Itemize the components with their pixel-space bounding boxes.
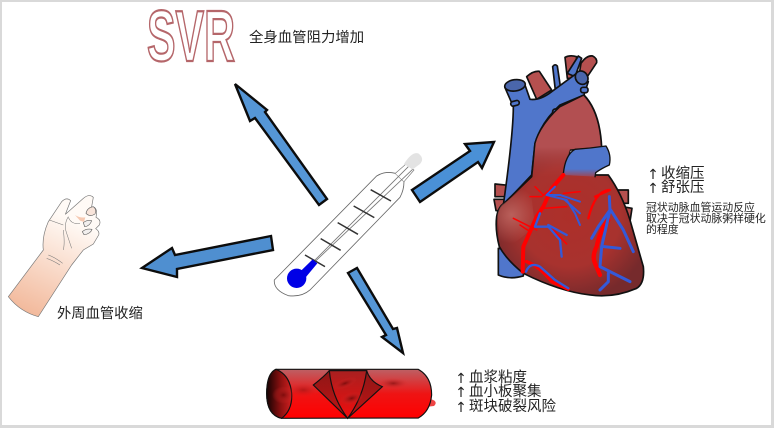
icon: thermometer bbox=[274, 153, 422, 296]
label: peripheral vasoconstriction: 外周血管收缩 bbox=[57, 305, 143, 322]
text: blood effects: ↑ bbox=[455, 400, 467, 416]
coronary veins bbox=[526, 187, 633, 290]
icon: heart bbox=[494, 56, 644, 296]
coronary arteries bbox=[513, 175, 610, 289]
text: blood effects: 斑块破裂风险 bbox=[469, 398, 556, 415]
text: blood effects: ↑ bbox=[455, 385, 467, 401]
text: blood effects: ↑ bbox=[455, 371, 467, 387]
heart pulmonary trunk bbox=[563, 146, 610, 177]
arrow: to heart bbox=[412, 142, 494, 202]
arrow: to hand bbox=[142, 236, 273, 277]
text: blood effects bbox=[455, 368, 556, 416]
heart veins bbox=[498, 56, 591, 278]
text: systolic and diastolic pressure: ↑ bbox=[647, 167, 659, 183]
icon: blood vessel bbox=[267, 369, 436, 418]
text: systolic and diastolic pressure: 舒张压 bbox=[661, 179, 704, 196]
text: systolic and diastolic pressure: ↑ bbox=[647, 181, 659, 197]
arrow: to blood vessel bbox=[348, 268, 403, 353]
heart body bbox=[496, 95, 644, 296]
label: systemic vascular resistance: 全身血管阻力增加 bbox=[249, 28, 364, 46]
text: blood effects: 血小板聚集 bbox=[469, 382, 542, 400]
text: systolic and diastolic pressure: 收缩压 bbox=[661, 165, 704, 182]
text: coronary vasomotor response: 取决于冠状动脉粥样硬化 bbox=[646, 211, 766, 225]
text: coronary vasomotor response bbox=[646, 200, 766, 236]
text: blood effects: 血浆粘度 bbox=[469, 368, 527, 386]
heart back vessels bbox=[494, 56, 632, 222]
icon: hand bbox=[8, 196, 100, 317]
text: coronary vasomotor response: 冠状动脉血管运动反应 bbox=[646, 200, 755, 214]
text: coronary vasomotor response: 的程度 bbox=[646, 222, 679, 236]
arrow: to SVR bbox=[235, 84, 327, 205]
text: systolic and diastolic pressure bbox=[647, 165, 704, 197]
